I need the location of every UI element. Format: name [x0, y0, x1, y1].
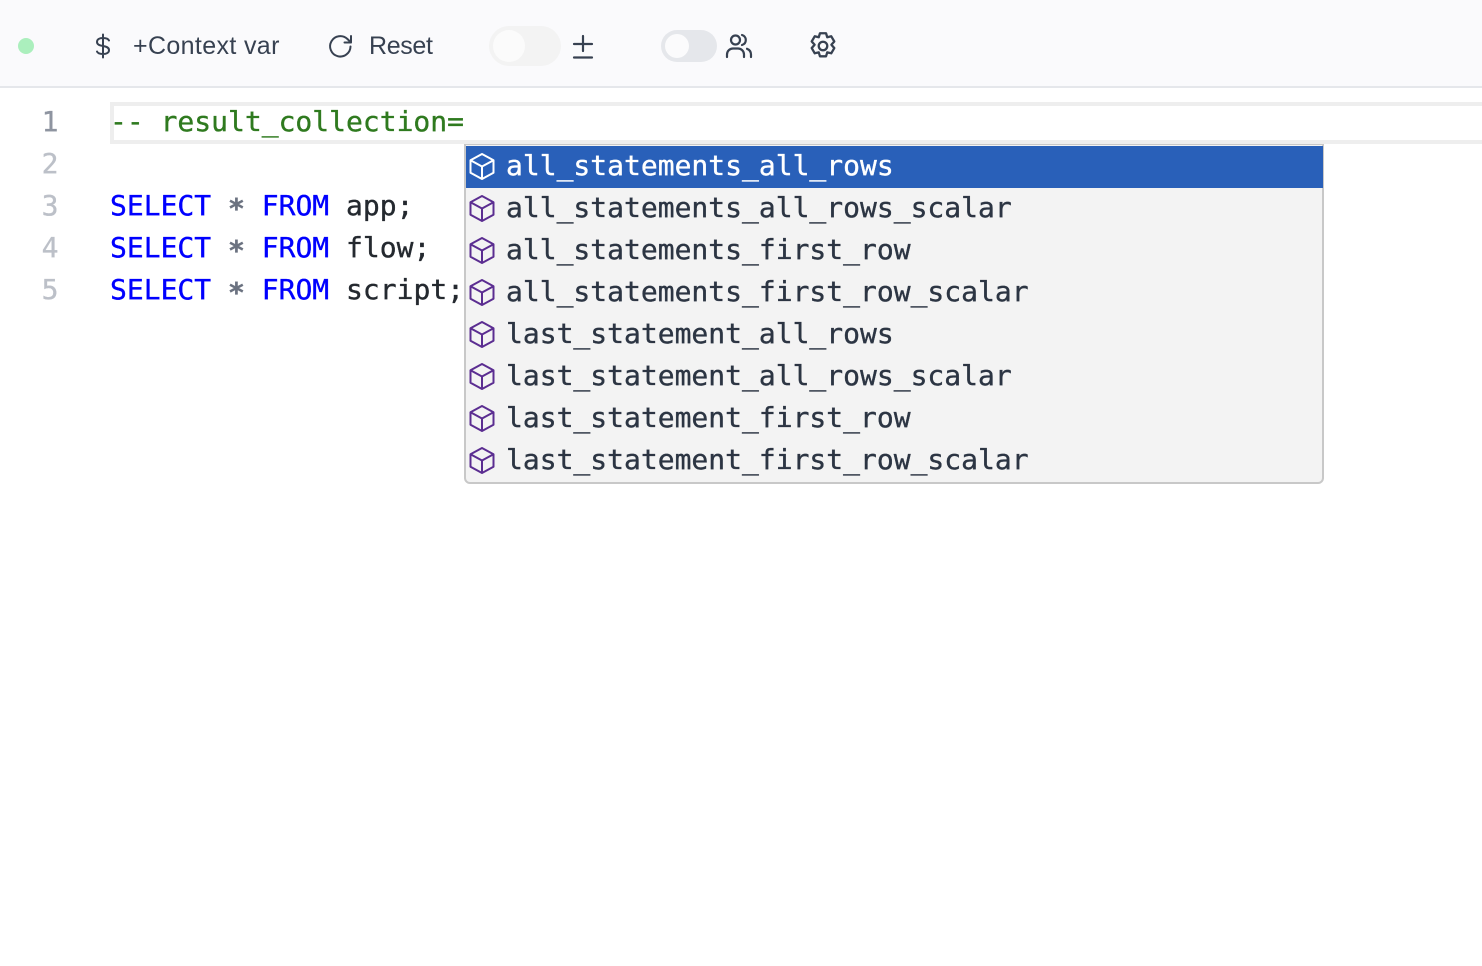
- suggestion: all_statements_first_row_scalar: [506, 275, 1029, 308]
- suggestion: last_statement_all_rows: [506, 317, 894, 350]
- line numbers: 1: [42, 105, 58, 138]
- line numbers: [42, 105, 58, 306]
- line numbers: 2: [42, 147, 58, 180]
- toggle: diff: [489, 26, 561, 66]
- icon: settings: [810, 32, 836, 58]
- suggestion: all_statements_first_row: [506, 233, 911, 266]
- code lines: SELECT * FROM script;: [110, 273, 464, 309]
- suggestion: all_statements_all_rows_scalar: [506, 191, 1012, 224]
- line numbers: 4: [42, 231, 58, 264]
- icon: dollar: [96, 34, 110, 58]
- selected suggestion: [466, 146, 1323, 188]
- status dot: [18, 38, 34, 54]
- active line highlight: [110, 102, 1482, 144]
- toolbar: [0, 0, 1482, 88]
- toggle: shared: [661, 30, 717, 62]
- icon: users: [726, 34, 752, 58]
- code lines: [110, 105, 464, 309]
- autocomplete dropdown: [464, 144, 1324, 484]
- code lines: SELECT * FROM flow;: [110, 231, 430, 267]
- button label: reset: Reset: [369, 32, 433, 60]
- code lines: SELECT * FROM app;: [110, 189, 413, 225]
- suggestion: last_statement_all_rows_scalar: [506, 359, 1012, 392]
- icon: reset: [329, 35, 352, 58]
- icon: plus minus: [572, 34, 594, 59]
- selected suggestion: all_statements_all_rows: [506, 149, 894, 182]
- suggestion: last_statement_first_row_scalar: [506, 443, 1029, 476]
- suggestion: last_statement_first_row: [506, 401, 911, 434]
- line numbers: 3: [42, 189, 58, 222]
- code lines: -- result_collection=: [110, 105, 464, 138]
- button label: context var: +Context var: [133, 32, 280, 60]
- line numbers: 5: [42, 273, 58, 306]
